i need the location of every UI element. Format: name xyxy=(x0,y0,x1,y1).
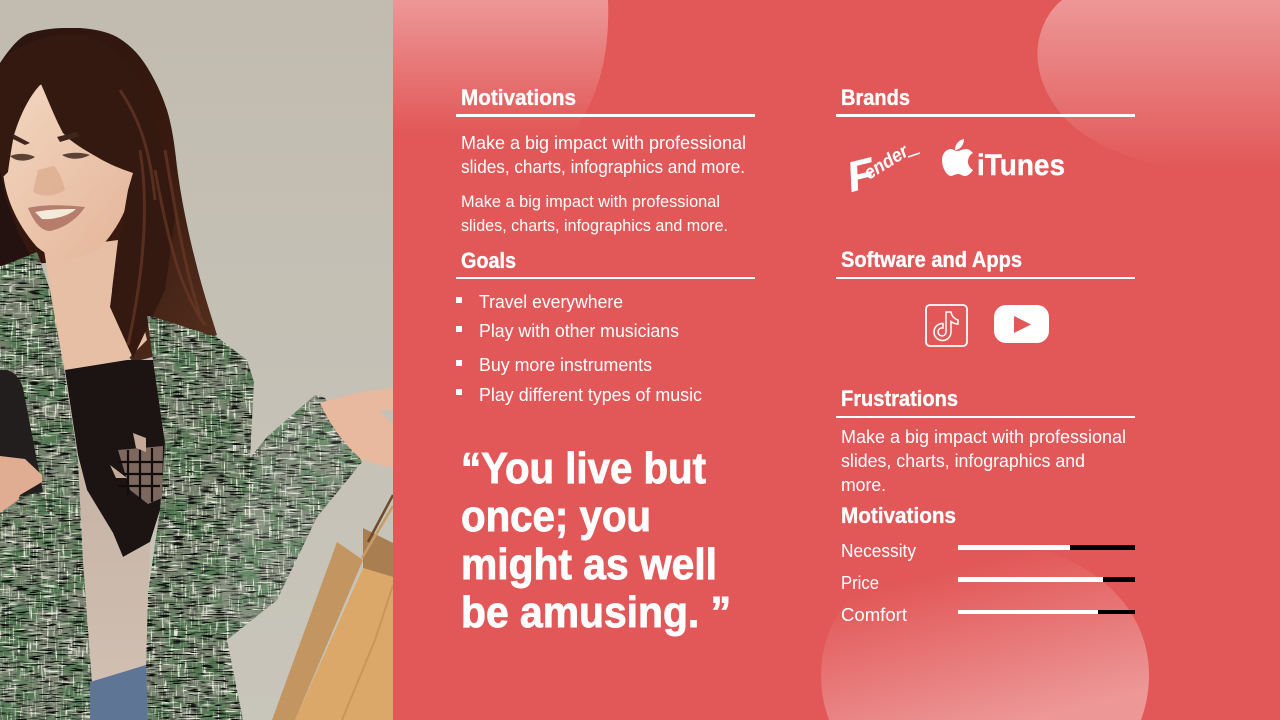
quote: “You live but xyxy=(461,444,706,493)
logo: Fender xyxy=(842,140,920,201)
black top and lace xyxy=(65,360,165,557)
heading: brands: Brands xyxy=(841,85,910,110)
jeans xyxy=(90,665,148,720)
text block: motivations paragraph 1: slides, charts, infographics and more. xyxy=(461,157,745,177)
rule xyxy=(456,277,755,279)
section: motivations bar chart xyxy=(841,503,1135,625)
quote: be amusing. ” xyxy=(461,588,731,637)
bar: price: Price xyxy=(841,573,879,593)
neck xyxy=(44,240,147,372)
section: motivations (left column) xyxy=(456,85,755,235)
bar: necessity xyxy=(841,541,1135,561)
logo: Apple iTunes: iTunes xyxy=(977,149,1065,182)
rule xyxy=(456,114,755,117)
logo: Fender: ender xyxy=(861,140,914,184)
heading: motivations: Motivations xyxy=(461,85,576,110)
bullet list: goals xyxy=(456,292,702,405)
text block: motivations paragraph 2: Make a big impact with professional xyxy=(461,192,720,211)
text block: motivations paragraph 1 xyxy=(461,133,746,177)
icon: YouTube xyxy=(994,305,1049,343)
face xyxy=(3,84,139,260)
text block: frustrations: slides, charts, infographics and xyxy=(841,451,1085,471)
logo: Apple iTunes xyxy=(942,139,1065,182)
quote xyxy=(461,444,731,637)
quote: once; you xyxy=(461,492,651,541)
heading: software and apps: Software and Apps xyxy=(841,247,1022,272)
phone xyxy=(0,370,43,500)
decorative gradient blob: top left xyxy=(393,0,608,140)
bangs and front hair xyxy=(0,34,176,358)
icon: apple xyxy=(942,139,973,176)
quote: might as well xyxy=(461,540,717,589)
bar: comfort: Comfort xyxy=(841,605,907,625)
icon: TikTok xyxy=(926,305,967,346)
left hand xyxy=(0,456,42,513)
jacket and sleeve xyxy=(0,252,362,720)
bullet list: goals: Play different types of music xyxy=(479,385,702,405)
rule xyxy=(836,114,1135,117)
shopping bag xyxy=(272,495,393,720)
section: goals xyxy=(456,248,755,405)
heading: frustrations: Frustrations xyxy=(841,386,958,411)
rule xyxy=(836,416,1135,418)
decorative gradient blob: top right xyxy=(1037,0,1280,180)
bar: comfort xyxy=(841,605,1135,625)
bullet list: goals: Travel everywhere xyxy=(479,292,623,312)
rule xyxy=(836,277,1135,279)
text block: motivations paragraph 2: slides, charts, infographics and more. xyxy=(461,216,728,235)
section: brands xyxy=(836,85,1135,201)
text block: motivations paragraph 1: Make a big impact with professional xyxy=(461,133,746,153)
bar: price xyxy=(841,573,1135,593)
hair xyxy=(0,28,217,362)
heading: goals: Goals xyxy=(461,248,516,273)
heading: motivations: Motivations xyxy=(841,503,956,528)
bullet list: goals: Play with other musicians xyxy=(479,321,679,341)
text block: frustrations: more. xyxy=(841,475,886,495)
photo: woman holding phone and shopping bag xyxy=(0,0,393,720)
section: software and apps xyxy=(836,247,1135,346)
text block: motivations paragraph 2 xyxy=(461,192,728,235)
facial features xyxy=(10,132,90,231)
bare torso xyxy=(78,458,150,682)
text block: frustrations xyxy=(841,427,1126,495)
section: frustrations xyxy=(836,386,1135,495)
decorative gradient blob: bottom xyxy=(821,540,1149,720)
panel: red background xyxy=(393,0,1280,720)
text block: frustrations: Make a big impact with professional xyxy=(841,427,1126,447)
bar: necessity: Necessity xyxy=(841,541,916,561)
logo: Fender: F xyxy=(842,148,881,201)
right hand xyxy=(320,388,393,468)
bullet list: goals: Buy more instruments xyxy=(479,355,652,375)
